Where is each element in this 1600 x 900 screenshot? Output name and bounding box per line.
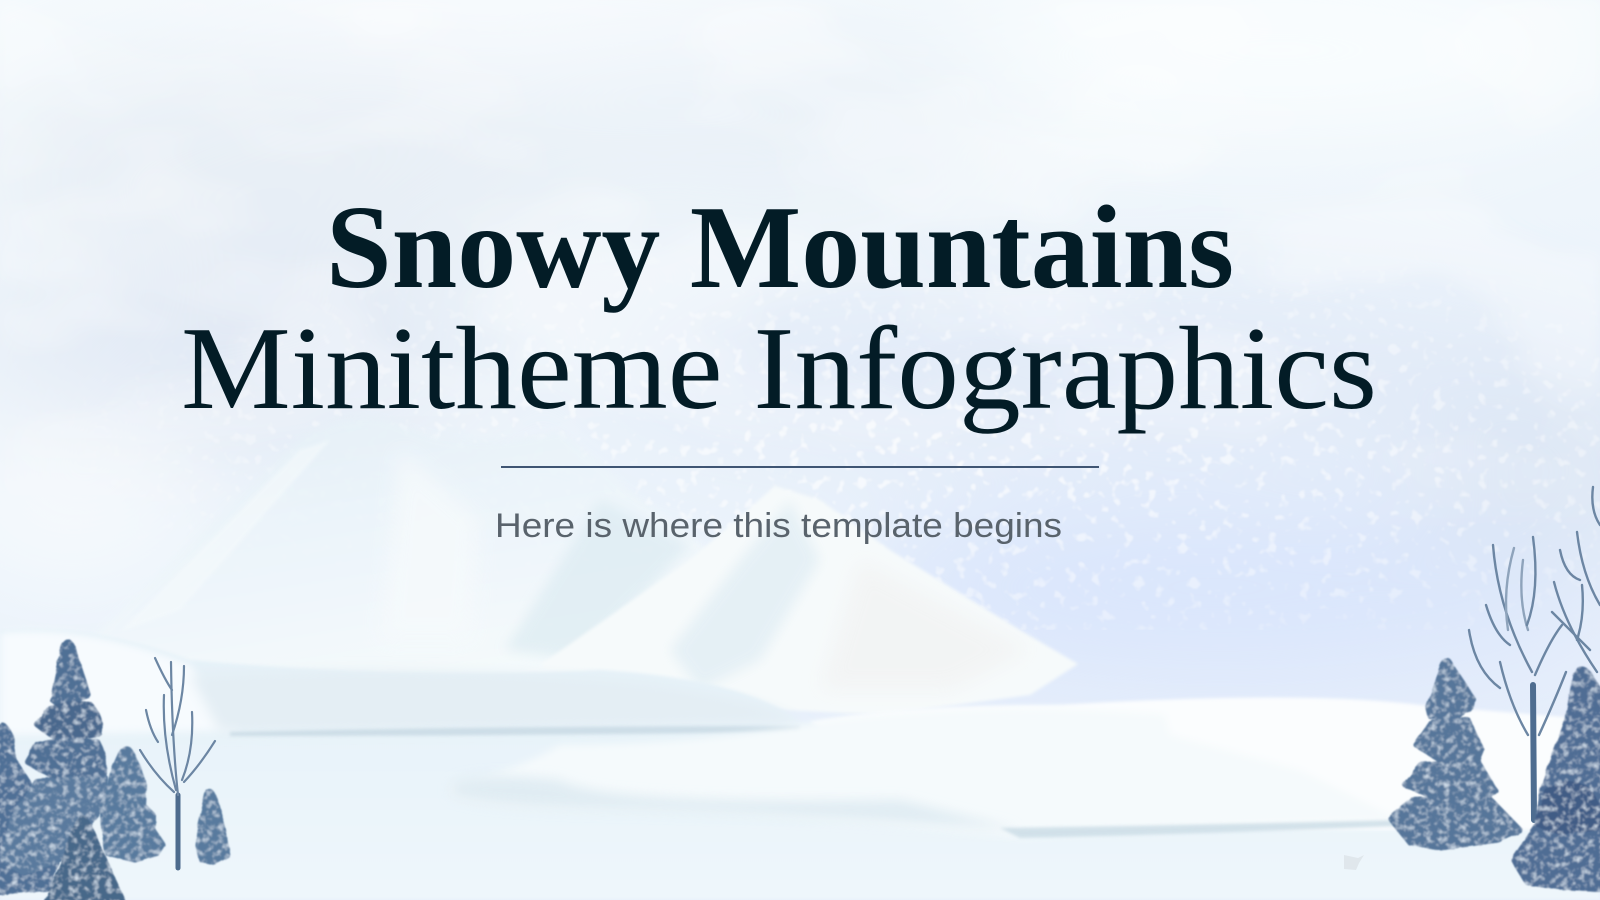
pine tree: cut off right [1513, 669, 1600, 890]
pine tree: far left [0, 726, 58, 893]
ground: snowfield [0, 629, 1600, 900]
title [181, 181, 1377, 434]
cloud mottling [278, 324, 338, 354]
trees: right group [1390, 487, 1600, 890]
background: watercolor sky [2, 0, 1600, 714]
mountains [95, 418, 1078, 715]
pine tree: front [46, 817, 123, 900]
bare tree [140, 658, 215, 868]
pine tree: middle [102, 748, 163, 860]
mountain: left peak [95, 418, 780, 700]
pine tree: tall [3, 642, 107, 872]
mountain: right peak [540, 486, 1078, 715]
snow speckles [438, 295, 1600, 629]
pine tree: large right [1390, 660, 1520, 848]
trees: left group [0, 642, 228, 900]
title line 1: Snowy Mountains [326, 181, 1234, 313]
bare tree: back right [1552, 487, 1600, 672]
pine tree: small [197, 792, 228, 863]
title line 2: Minitheme Infographics [181, 302, 1377, 434]
subtitle: Here is where this template begins [495, 507, 1062, 545]
bare tree: center right [1469, 537, 1566, 820]
divider line [501, 466, 1099, 468]
